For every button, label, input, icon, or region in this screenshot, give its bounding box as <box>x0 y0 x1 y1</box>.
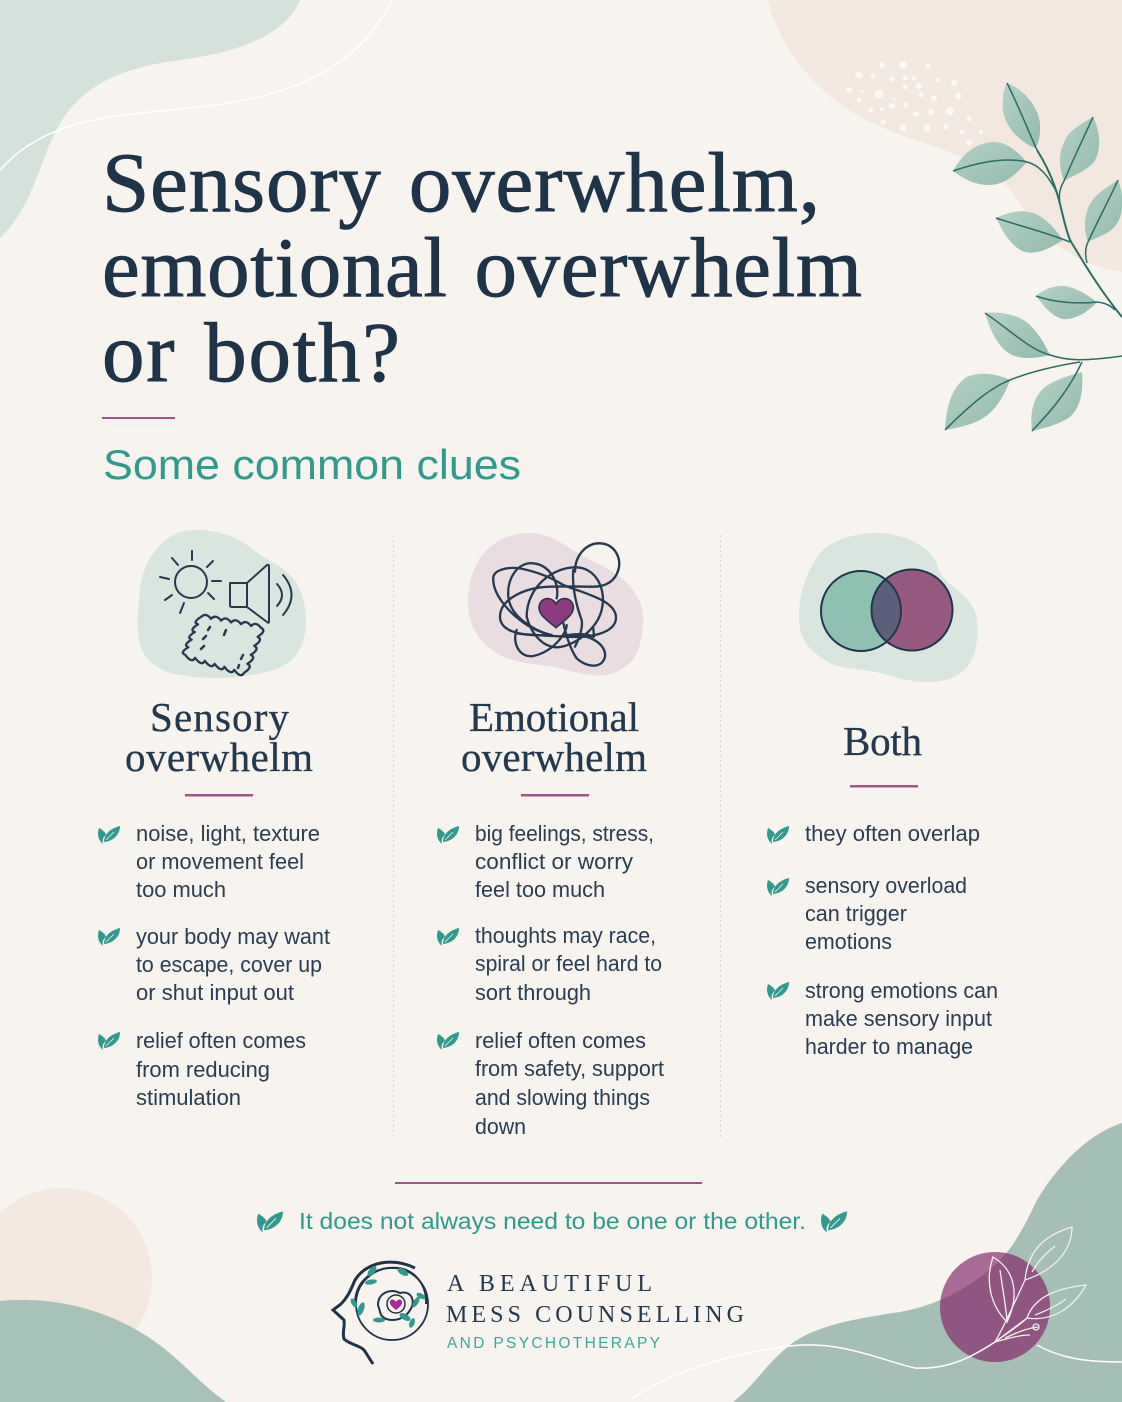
heading: emotional overwhelm: overwhelm <box>461 734 647 780</box>
callout: closing message: It does not always need to be one or the other. <box>299 1208 806 1234</box>
heading rule <box>850 785 918 788</box>
background line: bottom right curve <box>630 1342 1122 1400</box>
icon: sun, speaker and fabric <box>138 530 306 678</box>
title: or both? <box>102 306 400 400</box>
heading: both: Both <box>843 718 922 764</box>
list: sensory clues: noise, light, texture <box>136 821 320 846</box>
list: emotional clues <box>437 821 665 1139</box>
background shape: bottom right teal blob <box>733 1123 1122 1402</box>
list: emotional clues: feel too much <box>475 877 605 902</box>
panel: both <box>767 533 998 1059</box>
illustration: white line leaves <box>989 1227 1086 1342</box>
list: sensory clues: from reducing <box>136 1057 270 1082</box>
heading rule <box>521 794 589 796</box>
background line: top left curve <box>0 0 392 170</box>
title <box>102 136 862 400</box>
list: sensory clues: or shut input out <box>136 980 295 1005</box>
heading: sensory overwhelm <box>125 694 313 780</box>
icon: heart <box>539 599 573 628</box>
heading: emotional overwhelm: Emotional <box>469 694 639 740</box>
list: both clues: emotions <box>805 929 892 954</box>
list: both clues: can trigger <box>805 901 907 926</box>
title rule <box>102 417 175 419</box>
list: emotional clues: sort through <box>475 980 591 1005</box>
list: emotional clues: and slowing things <box>475 1085 650 1110</box>
list: both clues: they often overlap <box>805 821 980 846</box>
list: both clues: make sensory input <box>805 1006 993 1031</box>
panel: sensory overwhelm <box>98 530 331 1110</box>
list: sensory clues <box>98 821 331 1110</box>
list: both clues <box>767 821 998 1059</box>
illustration: leafy branch <box>945 83 1122 431</box>
list: emotional clues: relief often comes <box>475 1028 646 1053</box>
list: sensory clues: too much <box>136 877 226 902</box>
logo text: AND PSYCHOTHERAPY <box>447 1335 660 1352</box>
list: both clues: sensory overload <box>805 873 967 898</box>
title: emotional overwhelm <box>102 221 862 315</box>
list: emotional clues: spiral or feel hard to <box>475 951 662 976</box>
list: both clues: harder to manage <box>805 1034 973 1059</box>
list: emotional clues: from safety, support <box>475 1056 665 1081</box>
logo text: A BEAUTIFUL <box>447 1271 652 1297</box>
icon: tangled scribble with heart <box>468 533 643 675</box>
background shape: bottom left peach circle <box>0 1188 152 1368</box>
footer rule <box>395 1182 702 1184</box>
list: both clues: strong emotions can <box>805 978 998 1003</box>
heading rule <box>185 794 253 796</box>
column dividers <box>394 535 720 1137</box>
list: sensory clues: your body may want <box>136 924 331 949</box>
logo icon: head with spiral and heart <box>333 1262 428 1364</box>
list: emotional clues: down <box>475 1114 526 1139</box>
logo: a beautiful mess counselling <box>333 1262 744 1364</box>
list: sensory clues: to escape, cover up <box>136 952 322 977</box>
list: sensory clues: relief often comes <box>136 1028 306 1053</box>
list: sensory clues: stimulation <box>136 1085 241 1110</box>
heading: emotional overwhelm <box>461 694 647 780</box>
title: Sensory overwhelm, <box>102 136 820 230</box>
list: emotional clues: conflict or worry <box>475 849 634 874</box>
heading: sensory overwhelm: Sensory <box>150 694 290 740</box>
icon: overlapping circles <box>799 533 978 682</box>
background shape: bottom left teal blob <box>0 1300 226 1402</box>
background circle: bottom right purple <box>940 1252 1050 1362</box>
list: sensory clues: or movement feel <box>136 849 304 874</box>
background shape: top right peach blob <box>768 0 1122 272</box>
background dots: top right speckles <box>846 61 983 146</box>
logo text: MESS COUNSELLING <box>446 1302 744 1328</box>
logo text <box>446 1271 744 1352</box>
background shape: top left teal blob <box>0 0 300 238</box>
list: emotional clues: thoughts may race, <box>475 923 656 948</box>
heading: sensory overwhelm: overwhelm <box>125 734 313 780</box>
list: emotional clues: big feelings, stress, <box>475 821 654 846</box>
subtitle: Some common clues <box>103 441 521 488</box>
panel: emotional overwhelm <box>437 533 665 1139</box>
